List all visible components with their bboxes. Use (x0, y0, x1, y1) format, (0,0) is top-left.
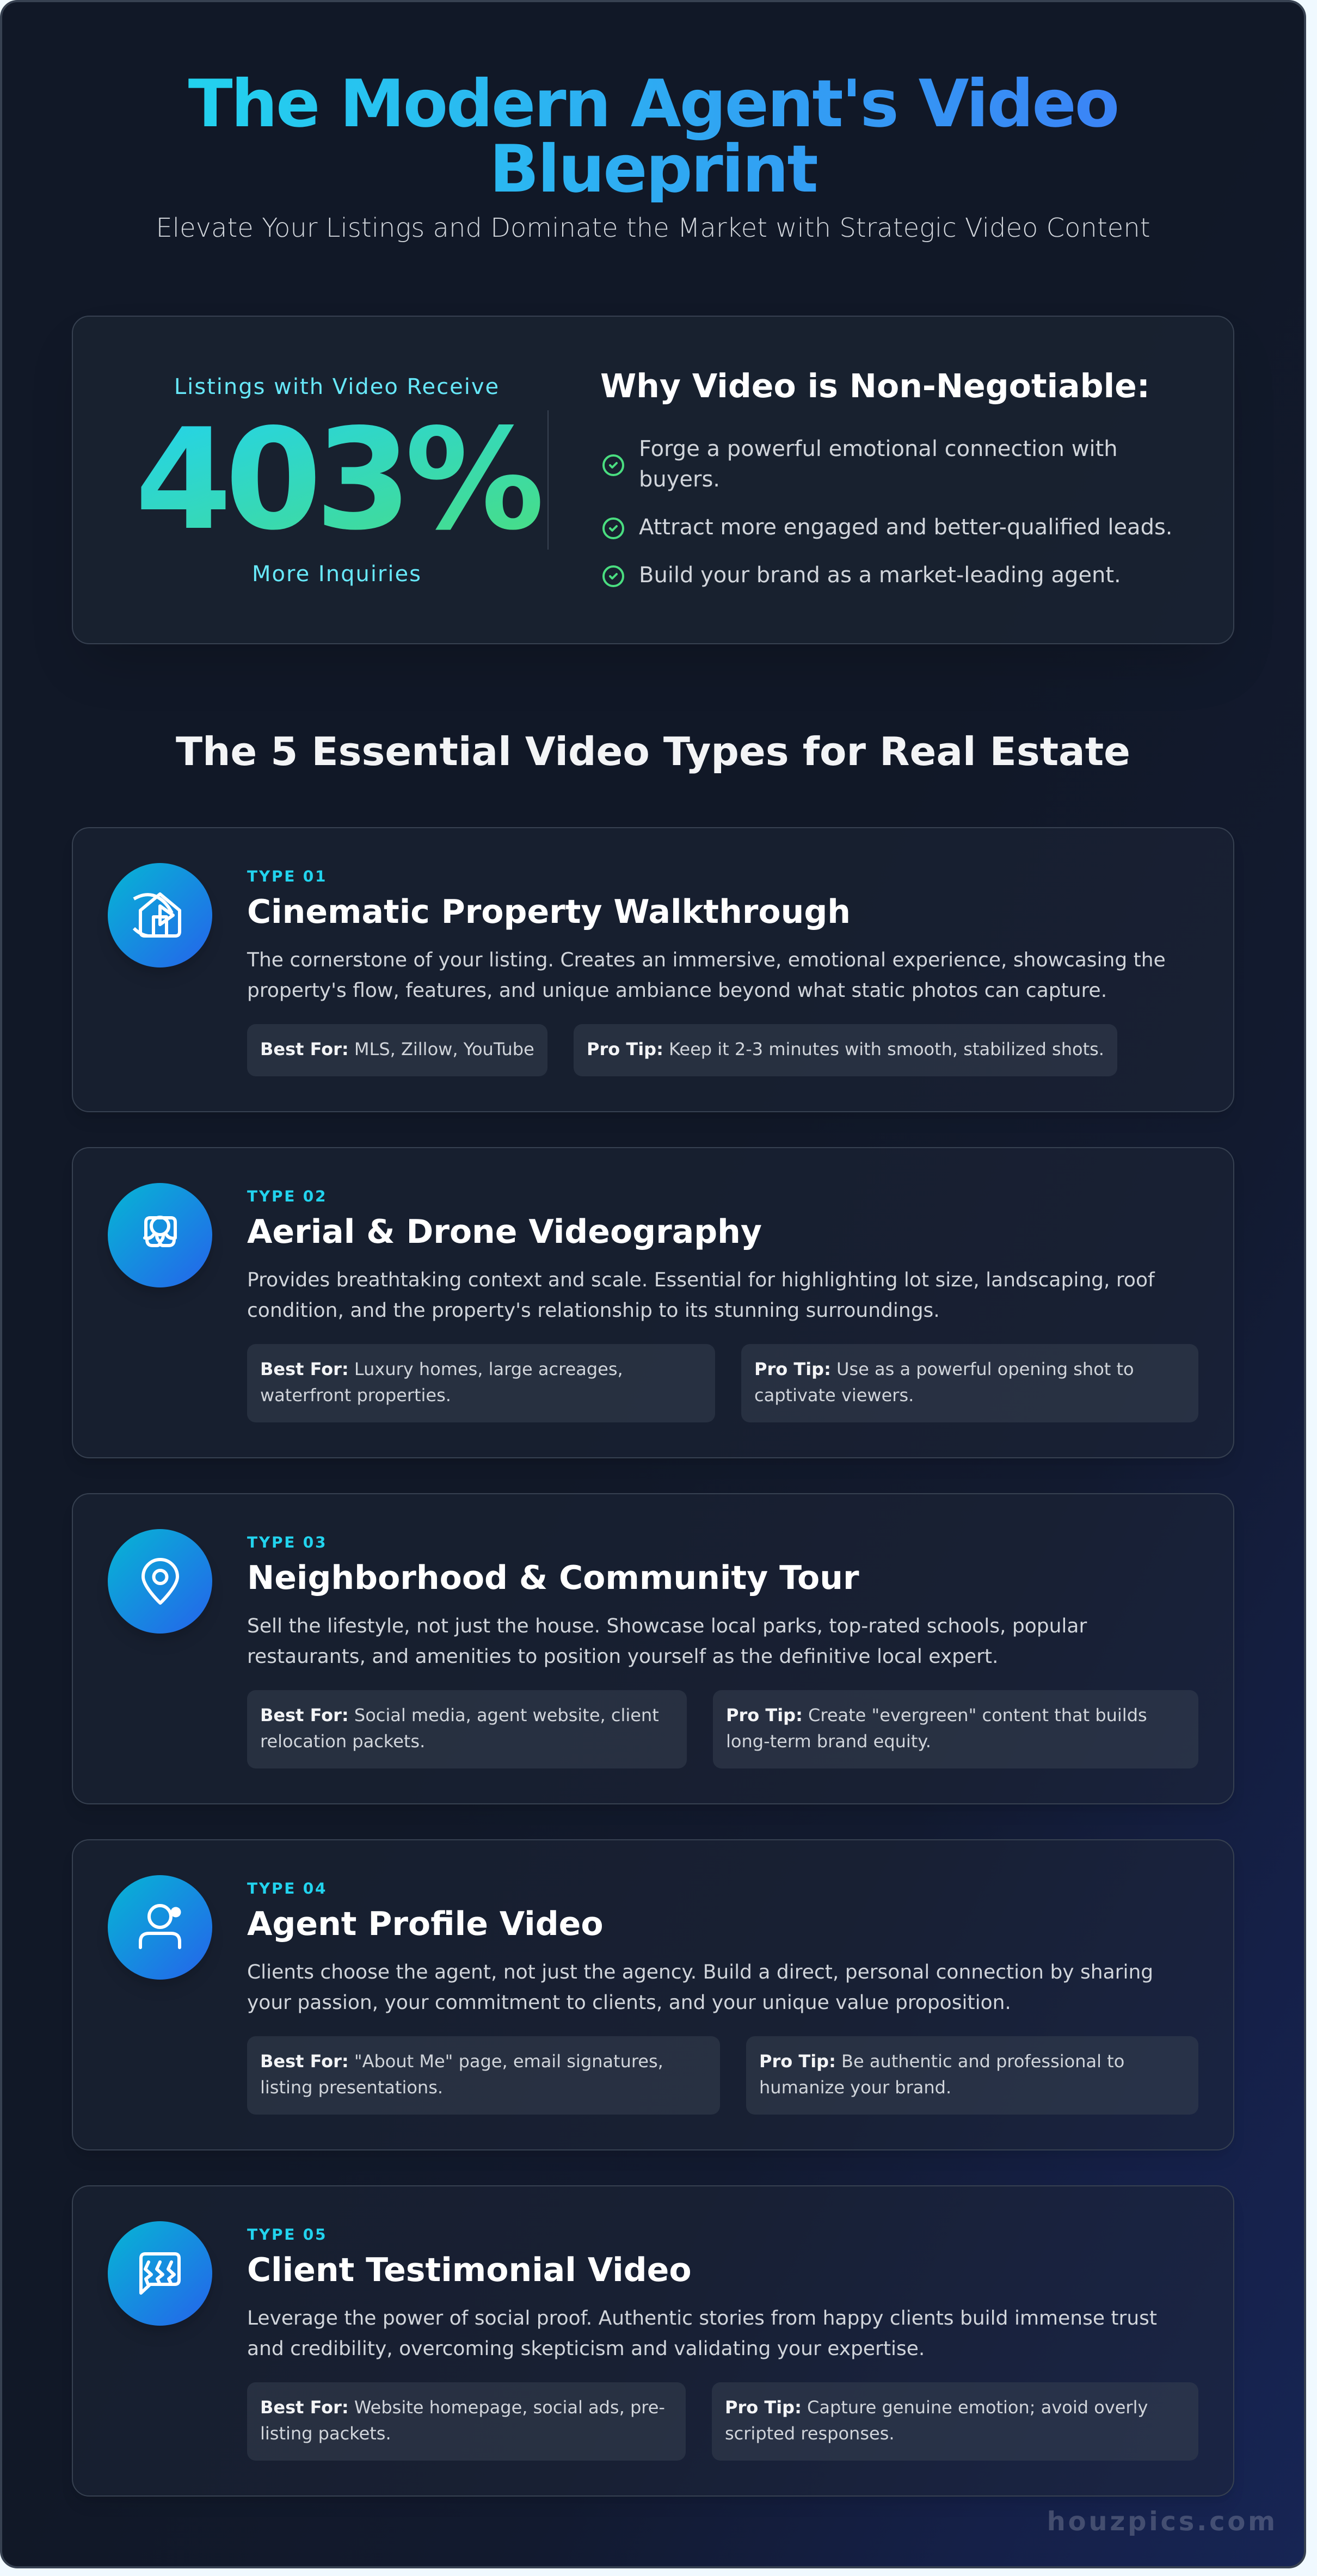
section heading: The 5 Essential Video Types for Real Estate (176, 729, 1130, 774)
pro tip chip: Pro Tip: Keep it 2-3 minutes with smooth, stabilized shots. (587, 1039, 1104, 1059)
type label: TYPE 02 (247, 1187, 327, 1205)
best for chip (247, 1344, 715, 1422)
best for chip: Best For: MLS, Zillow, YouTube (260, 1039, 534, 1059)
description: Provides breathtaking context and scale. Essential for highlighting lot size, landscaping, roof (247, 1269, 1155, 1291)
pro tip chip (713, 1690, 1198, 1768)
pro tip chip (712, 2382, 1198, 2461)
benefit 1: Forge a powerful emotional connection with (639, 436, 1118, 461)
description: restaurants, and amenities to position yourself as the definitive local expert. (247, 1646, 998, 1668)
stat label top: Listings with Video Receive (174, 374, 500, 399)
best for chip: listing presentations. (260, 2077, 443, 2098)
big stat 403%: 403% (135, 399, 538, 561)
pro tip chip: Pro Tip: Be authentic and professional to (759, 2051, 1124, 2072)
panel: hero stat (72, 316, 1234, 644)
best for chip (247, 2036, 720, 2115)
card title: Neighborhood & Community Tour (247, 1559, 859, 1597)
benefit 3: Build your brand as a market-leading agent. (639, 563, 1121, 588)
pro tip chip: Pro Tip: Use as a powerful opening shot to (754, 1359, 1134, 1379)
check icon 1 (602, 454, 624, 476)
stat label bottom: More Inquiries (252, 562, 422, 587)
panel: type 04 (72, 1839, 1234, 2150)
benefit 1 (639, 436, 1118, 492)
type label: TYPE 05 (247, 2226, 327, 2244)
description (247, 1269, 1155, 1322)
check icon 2 (602, 517, 624, 539)
divider (547, 410, 549, 550)
description: condition, and the property's relationship to its stunning surroundings. (247, 1299, 940, 1322)
card title: Cinematic Property Walkthrough (247, 893, 851, 931)
title: The Modern Agent's Video (188, 66, 1118, 142)
best for chip: relocation packets. (260, 1731, 425, 1752)
description (247, 949, 1166, 1002)
description: your passion, your commitment to clients, and your unique value proposition. (247, 1992, 1011, 2014)
description: and credibility, overcoming skepticism and validating your expertise. (247, 2338, 925, 2360)
best for chip: Best For: Website homepage, social ads, pre- (260, 2397, 665, 2418)
pro tip chip (741, 1344, 1198, 1422)
benefit 2: Attract more engaged and better-qualified leads. (639, 515, 1173, 540)
description (247, 2307, 1157, 2360)
pro tip chip: scripted responses. (725, 2423, 895, 2444)
title: Blueprint (489, 132, 817, 207)
description: Sell the lifestyle, not just the house. Showcase local parks, top-rated schools, popular (247, 1615, 1087, 1637)
best for chip (247, 1024, 547, 1076)
best for chip: waterfront properties. (260, 1385, 451, 1406)
type label: TYPE 01 (247, 867, 327, 885)
best for chip: listing packets. (260, 2423, 391, 2444)
benefit list (602, 436, 1173, 588)
icon: agent profile (108, 1875, 212, 1980)
icon: testimonial speech bubble (108, 2221, 212, 2326)
pro tip chip: long-term brand equity. (726, 1731, 931, 1752)
description: Clients choose the agent, not just the agency. Build a direct, personal connection by sharing (247, 1961, 1153, 1983)
icon: house with play (108, 863, 212, 967)
best for chip (247, 1690, 687, 1768)
type label: TYPE 04 (247, 1879, 327, 1897)
panel: type 02 (72, 1147, 1234, 1458)
card title: Aerial & Drone Videography (247, 1213, 762, 1251)
card title: Client Testimonial Video (247, 2251, 692, 2289)
best for chip: Best For: "About Me" page, email signatures, (260, 2051, 663, 2072)
watermark: houzpics.com (1047, 2506, 1278, 2537)
pro tip chip (574, 1024, 1117, 1076)
card title: Agent Profile Video (247, 1905, 604, 1943)
best for chip: Best For: Social media, agent website, client (260, 1705, 659, 1725)
description (247, 1615, 1087, 1668)
pro tip chip: captivate viewers. (754, 1385, 914, 1406)
description: The cornerstone of your listing. Creates an immersive, emotional experience, showcasing the (247, 949, 1166, 971)
description: Leverage the power of social proof. Authentic stories from happy clients build immense trust (247, 2307, 1157, 2330)
heading: why video: Why Video is Non-Negotiable: (600, 367, 1150, 405)
icon: drone (108, 1183, 212, 1287)
description: property's flow, features, and unique ambiance beyond what static photos can capture. (247, 979, 1107, 1002)
description (247, 1961, 1153, 2014)
icon: map pin (108, 1529, 212, 1634)
check icon 3 (602, 565, 624, 587)
subtitle: Elevate Your Listings and Dominate the Market with Strategic Video Content (156, 213, 1150, 243)
best for chip: Best For: Luxury homes, large acreages, (260, 1359, 623, 1379)
type label: TYPE 03 (247, 1533, 327, 1551)
panel: type 03 (72, 1493, 1234, 1804)
title (174, 72, 1132, 202)
pro tip chip: humanize your brand. (759, 2077, 951, 2098)
panel: type 01 (72, 827, 1234, 1112)
pro tip chip: Pro Tip: Create "evergreen" content that builds (726, 1705, 1147, 1725)
pro tip chip: Pro Tip: Capture genuine emotion; avoid overly (725, 2397, 1148, 2418)
panel: type 05 (72, 2185, 1234, 2497)
best for chip (247, 2382, 686, 2461)
benefit 1: buyers. (639, 467, 720, 492)
pro tip chip (746, 2036, 1198, 2115)
